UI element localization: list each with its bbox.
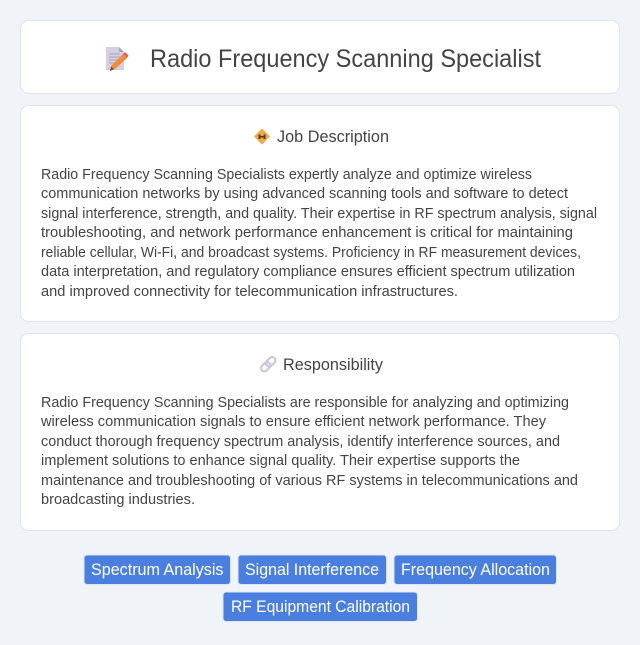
- text block: job description: [41, 167, 597, 300]
- text block: job description: and improved connectivity for telecommunication infrastructures.: [41, 284, 458, 300]
- tag: signal interference: Signal Interference: [245, 560, 379, 579]
- tag: rf equipment calibration: [223, 592, 418, 622]
- title: Radio Frequency Scanning Specialist: [150, 45, 541, 73]
- text block: responsibility: maintenance and troubleshooting of various RF systems in telecommunications and: [41, 473, 578, 489]
- icon: diamond sign: [254, 128, 270, 144]
- heading: responsibility: Responsibility: [283, 356, 384, 374]
- text block: responsibility: Radio Frequency Scanning Specialists are responsible for analyzing and optimizing: [41, 395, 569, 411]
- text block: responsibility: broadcasting industries.: [41, 492, 195, 508]
- text block: responsibility: wireless communication signals to ensure efficient network performance. They: [40, 414, 547, 430]
- tag: signal interference: [238, 555, 386, 584]
- panel: responsibility: [20, 334, 620, 530]
- text block: job description: signal interference, strength, and quality. Their expertise in RF spectrum analysis, signal: [41, 206, 597, 222]
- text block: job description: data interpretation, and regulatory compliance ensures efficient spectrum utilization: [41, 264, 575, 280]
- text block: job description: Radio Frequency Scanning Specialists expertly analyze and optimize wireless: [41, 167, 532, 183]
- tag: spectrum analysis: [84, 555, 230, 584]
- tag: spectrum analysis: Spectrum Analysis: [91, 560, 224, 579]
- text block: responsibility: implement solutions to enhance signal quality. Their expertise supports the: [41, 453, 520, 469]
- tag: frequency allocation: [394, 555, 556, 584]
- text block: job description: reliable cellular, Wi-Fi, and broadcast systems. Proficiency in RF measurement devices,: [41, 245, 581, 261]
- text block: job description: troubleshooting, and network performance enhancement is critical for maintaining: [41, 225, 573, 241]
- header panel: [20, 20, 620, 94]
- icon: document with pencil: [106, 47, 128, 71]
- tag: frequency allocation: Frequency Allocation: [401, 560, 550, 579]
- text block: job description: communication networks by using advanced scanning tools and software to detect: [41, 186, 568, 202]
- text block: responsibility: conduct thorough frequency spectrum analysis, identify interference sources, and: [41, 434, 560, 450]
- tag: rf equipment calibration: RF Equipment Calibration: [231, 597, 410, 616]
- tags: [84, 555, 556, 622]
- text block: responsibility: [40, 395, 578, 508]
- panel: job description: [20, 106, 620, 322]
- icon: chain link: [260, 356, 277, 373]
- heading: job description: Job Description: [277, 128, 389, 146]
